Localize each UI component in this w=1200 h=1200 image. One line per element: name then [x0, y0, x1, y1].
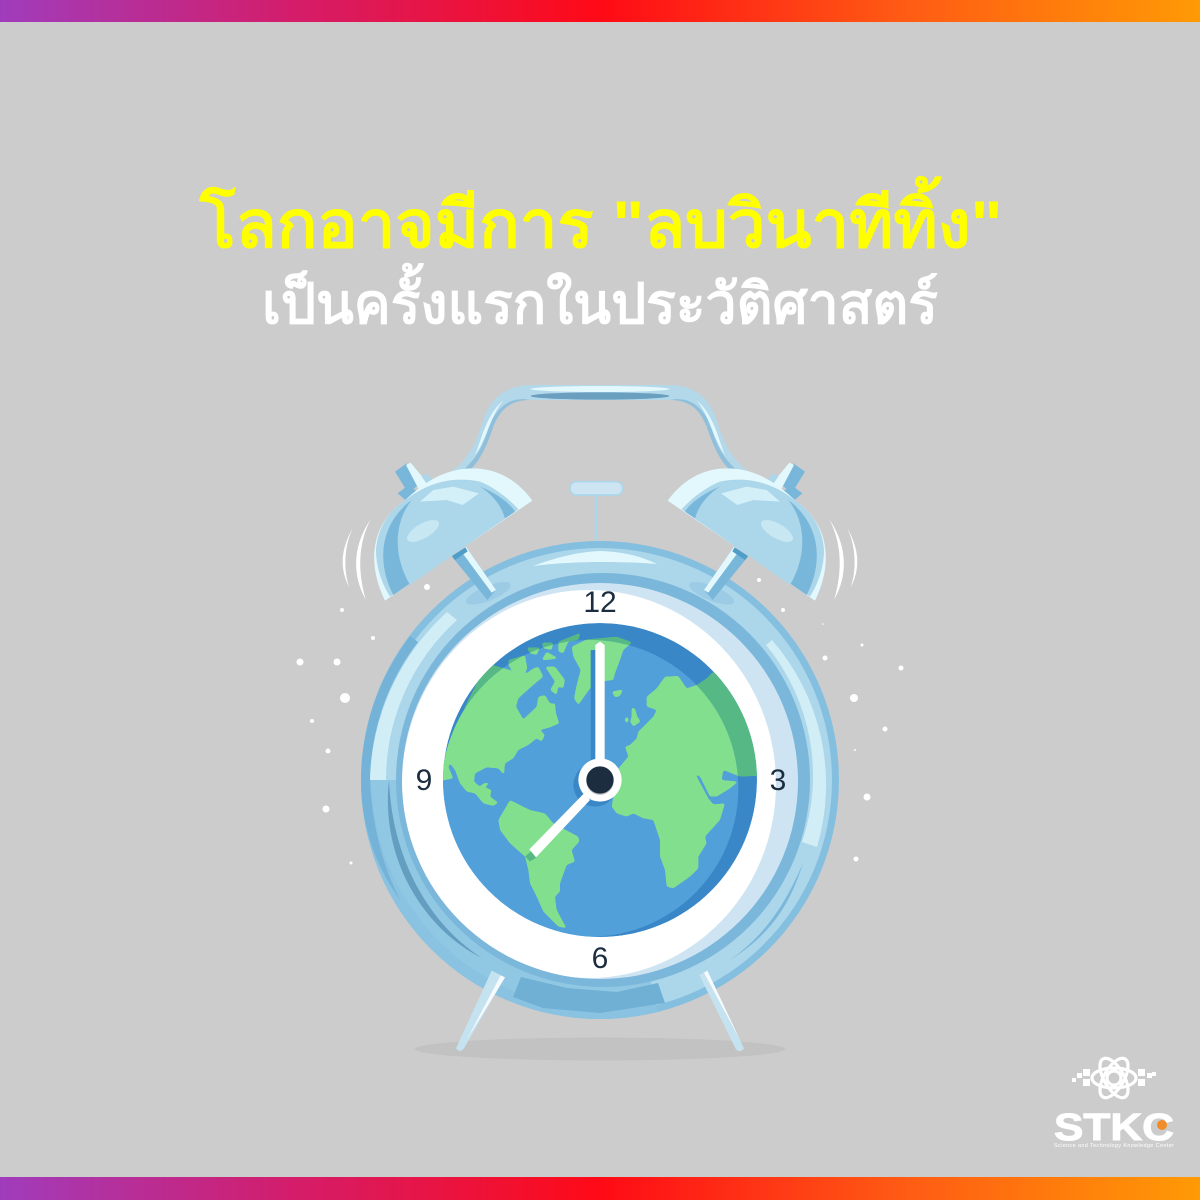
logo wordmark: STKC [1054, 1107, 1174, 1149]
lower-left rim shade [361, 780, 657, 1019]
right lower streak [730, 863, 803, 960]
vibration arcs left [343, 519, 371, 599]
left bell [374, 463, 532, 601]
rim face [368, 548, 832, 1012]
dial numbers: 9 [416, 764, 432, 797]
outer rim [361, 541, 839, 1019]
title: เป็นครั้งแรกในประวัติศาสตร์ [262, 263, 938, 335]
clock feet [456, 971, 744, 1051]
bell stems [452, 547, 748, 609]
eurasia and africa [612, 672, 763, 888]
right bell [668, 463, 826, 601]
north america [437, 663, 559, 806]
white dial face [402, 590, 776, 978]
logo: STKC [1054, 1054, 1174, 1149]
dial numbers [416, 586, 786, 975]
inner ring [396, 573, 810, 987]
logo pixel squares [1072, 1069, 1156, 1086]
greenland [572, 637, 632, 705]
logo orange dot [1157, 1120, 1167, 1130]
bottom-left streak [388, 780, 482, 958]
land light [443, 640, 738, 928]
minute hand [595, 642, 605, 767]
ocean dark [443, 623, 757, 937]
vibration arcs right [829, 519, 857, 599]
knob [395, 463, 420, 493]
uk [624, 717, 628, 723]
globe [437, 623, 763, 937]
dial numbers: 3 [770, 764, 786, 797]
ocean light [442, 640, 738, 937]
bottom gradient bar [0, 1177, 1200, 1200]
arctic islands [508, 655, 527, 676]
right highlight [766, 640, 826, 847]
sparkle dots [296, 578, 904, 864]
dial numbers: 6 [592, 942, 608, 975]
dial numbers: 12 [583, 586, 617, 619]
top gradient bar [0, 0, 1200, 22]
hour hand [529, 793, 590, 857]
title: โลกอาจมีการ "ลบวินาทีทิ้ง" [198, 175, 1003, 261]
clock body [361, 541, 839, 1019]
left rim shade [361, 636, 418, 900]
title [198, 175, 1003, 335]
logo atom icon [1092, 1054, 1136, 1102]
bottom shelf [513, 977, 665, 1013]
logo tagline: Science and Technology Knowledge Center [1054, 1143, 1174, 1149]
top highlight [533, 551, 657, 566]
dome [374, 468, 532, 601]
dial [402, 583, 798, 979]
left highlight [370, 612, 457, 780]
floor shadow [415, 1038, 785, 1060]
land shadow [464, 634, 757, 776]
iceland [612, 690, 622, 697]
clock handle [447, 385, 753, 475]
snooze button [570, 482, 623, 560]
south america [498, 800, 579, 928]
hand shadows [590, 650, 596, 760]
hub [578, 758, 622, 802]
